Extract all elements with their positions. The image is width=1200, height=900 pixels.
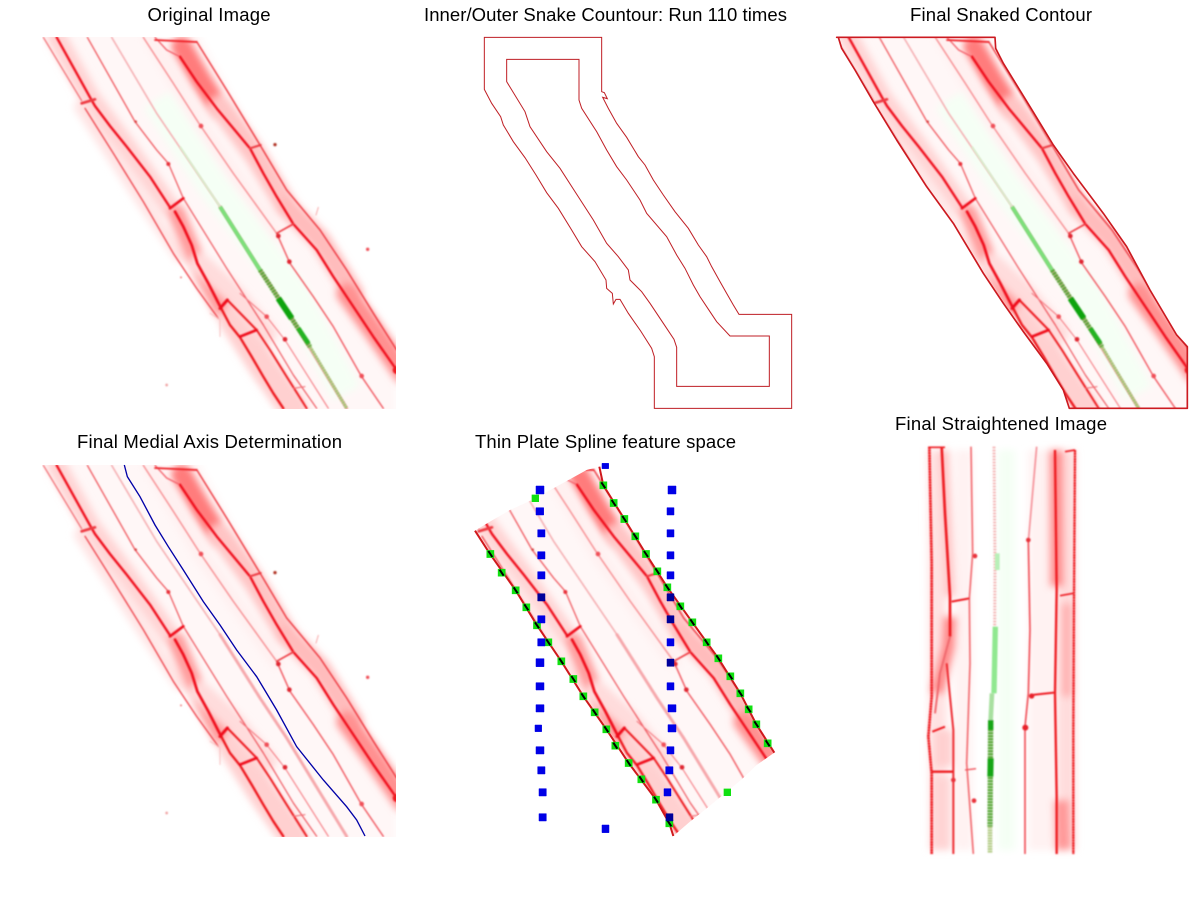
- medial axis line: [124, 465, 365, 836]
- panel: final snaked contour: [834, 4, 1195, 420]
- green corner landmarks: [532, 495, 731, 796]
- dark blue overlaps: [538, 594, 674, 821]
- heading: straightened image: Final Straightened Image: [895, 413, 1107, 434]
- image: straightened root: [928, 447, 1075, 854]
- central line: [990, 447, 997, 853]
- heading: final snaked contour: Final Snaked Contour: [910, 4, 1092, 25]
- image: root with medial axis: [42, 458, 403, 848]
- tissue wash: [937, 450, 1067, 850]
- root edge lines: [475, 467, 774, 836]
- blue straightened landmarks: [535, 463, 676, 833]
- green edge landmarks: [487, 482, 771, 827]
- image: root original: [42, 30, 403, 420]
- heading: original image: Original Image: [148, 4, 270, 25]
- panel: thin plate spline feature space: [474, 434, 776, 836]
- heading: medial axis: Final Medial Axis Determination: [77, 431, 342, 452]
- cell walls: [928, 447, 1075, 854]
- feature points: [475, 463, 774, 836]
- panel: inner and outer snake contour: [424, 4, 792, 408]
- heading: thin plate spline: Thin Plate Spline feature space: [475, 431, 736, 452]
- image: cropped root: [476, 468, 774, 836]
- chart: snake contours: [484, 37, 792, 408]
- outer contour: [484, 37, 792, 408]
- panel: final straightened image: [895, 413, 1107, 854]
- panel: final medial axis determination: [42, 431, 403, 848]
- heading: snake contour: Inner/Outer Snake Countour: Run 110 times: [424, 4, 787, 25]
- image: masked root: [834, 30, 1195, 420]
- black landmark crossings: [488, 482, 770, 826]
- inner contour: [507, 59, 769, 386]
- panel: original image: [42, 4, 403, 420]
- contour outline: [837, 37, 1187, 408]
